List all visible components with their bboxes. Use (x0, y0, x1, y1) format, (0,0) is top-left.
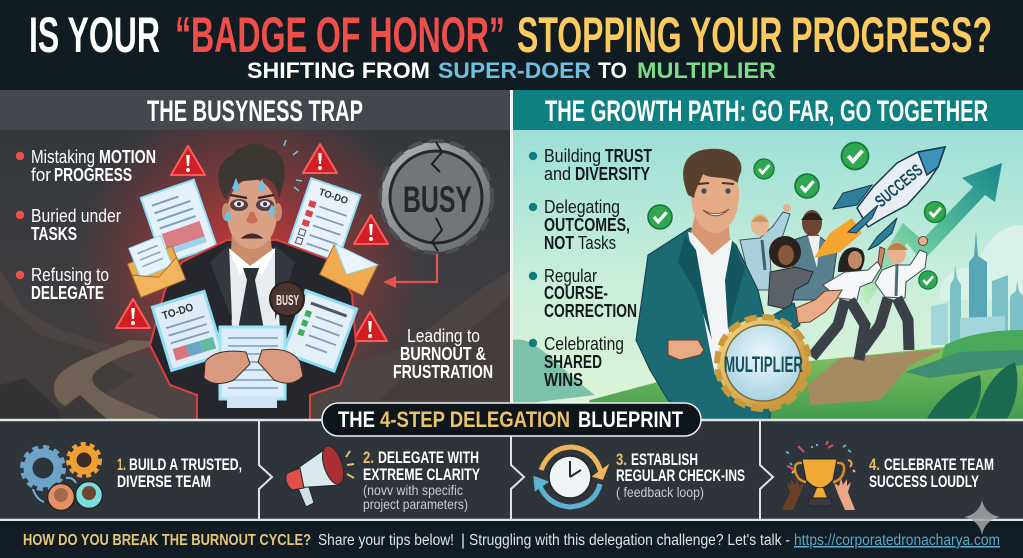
bullet list: WINS (544, 370, 583, 390)
rocket flame (814, 218, 862, 258)
step 3: REGULAR CHECK-INS (616, 467, 745, 485)
blueprint banner (322, 403, 701, 436)
bullet list (16, 147, 156, 303)
jacket (636, 228, 800, 422)
team (740, 204, 928, 360)
document to-do lower (152, 291, 223, 370)
bullet list: Buried under (31, 206, 121, 226)
bullet list: for (31, 165, 51, 185)
document to-do (288, 178, 360, 261)
panel background (0, 130, 511, 422)
burnout callout (393, 326, 493, 382)
teammate afro (768, 236, 813, 310)
icons: warning triangles (116, 144, 388, 341)
neck (231, 232, 272, 266)
title: IS YOUR (29, 7, 160, 63)
collar (229, 246, 275, 275)
eyes (230, 195, 274, 211)
document centre (220, 327, 285, 408)
step 2: project parameters) (363, 496, 468, 512)
bullet list: OUTCOMES, (544, 215, 630, 235)
steps background (0, 420, 1023, 521)
document left (141, 180, 217, 264)
bullet list (529, 146, 652, 390)
sparkle watermark (964, 500, 1000, 535)
hair (683, 149, 741, 198)
bullet list: Tasks (578, 233, 616, 253)
head (691, 157, 739, 233)
step 1: 1. (117, 456, 126, 474)
envelope right (320, 244, 378, 295)
rocket: SUCCESS (871, 161, 926, 211)
step 2: DELEGATE WITH (378, 449, 479, 467)
envelope left (122, 233, 185, 297)
document checklist lower (283, 291, 357, 371)
panel: delegation blueprint steps (0, 420, 1023, 521)
shirt (688, 232, 732, 375)
icon: clock with arrows (535, 447, 606, 507)
suit body (150, 240, 356, 422)
bullet list: NOT (544, 233, 574, 253)
step 3 (535, 447, 745, 507)
bullet list: Delegating (544, 197, 620, 217)
teammate suit (793, 210, 837, 300)
rocket (833, 147, 945, 250)
bullet list: Refusing to (31, 265, 109, 285)
neck (691, 215, 730, 255)
panel divider (510, 90, 513, 422)
step 2: 2. (363, 449, 374, 467)
bullet list: SHARED (544, 352, 602, 372)
step 2 (286, 443, 480, 512)
arrow to man (383, 254, 437, 288)
step 4 (782, 441, 994, 510)
bullet list: Building (544, 146, 601, 166)
subtitle: SUPER-DOER (438, 58, 591, 83)
small busy badge: BUSY (276, 292, 299, 309)
smile and eyes (698, 183, 734, 216)
hands (668, 290, 842, 360)
city skyline (931, 230, 1023, 345)
step 1: BUILD A TRUSTED, (129, 456, 242, 474)
step 2: EXTREME CLARITY (363, 466, 480, 484)
burnout callout: Leading to (407, 326, 480, 346)
document to-do: TO-DO (317, 187, 349, 207)
bullet list: COURSE- (544, 283, 608, 303)
bullet list: TRUST (605, 146, 652, 166)
bullet list: PROGRESS (54, 165, 132, 185)
chevron dividers (0, 420, 1023, 520)
tie (238, 268, 264, 345)
header band (0, 0, 1023, 90)
teammate woman (812, 247, 885, 360)
cloud (940, 225, 1023, 300)
burdened man (122, 140, 378, 422)
bullet list: and (544, 164, 571, 184)
busy badge: BUSY (403, 179, 472, 220)
footer call to action: Struggling with this delegation challenge? Let's talk - (469, 532, 790, 549)
heading bar (0, 90, 510, 130)
step 3: ESTABLISH (631, 451, 698, 469)
shirt (229, 248, 280, 330)
blueprint banner: THE (338, 407, 375, 432)
rocky ground (0, 270, 511, 422)
step 2: (novv with specific (363, 482, 463, 498)
panel: the busyness trap (0, 90, 511, 422)
bullet list: DIVERSITY (575, 164, 650, 184)
footer call to action: HOW DO YOU BREAK THE BURNOUT CYCLE? (23, 532, 311, 549)
subtitle: TO (598, 58, 627, 83)
panel: the growth path (513, 90, 1023, 422)
step 3: ( feedback loop) (616, 484, 704, 500)
hands (204, 349, 303, 384)
bullet list: CORRECTION (544, 301, 637, 321)
step 4: SUCCESS LOUDLY (869, 473, 979, 491)
bullet list: MOTION (99, 147, 156, 167)
lapels (678, 235, 745, 340)
bullet list: Mistaking (31, 147, 95, 167)
blueprint banner: 4-STEP DELEGATION (380, 407, 570, 432)
nose and mouth (246, 212, 258, 224)
footer call to action (0, 521, 1023, 558)
bullet list: Celebrating (544, 334, 624, 354)
title: “BADGE OF HONOR” (175, 7, 505, 63)
teammate glasses (740, 204, 791, 290)
bullet list: DELEGATE (31, 283, 104, 303)
footer call to action: https://corporatedronacharya.com (794, 532, 1000, 549)
icon: trophy and hands (782, 441, 855, 510)
head (227, 179, 277, 249)
sweat (225, 140, 302, 221)
bullet list: TASKS (31, 224, 77, 244)
icon: megaphone (286, 443, 354, 507)
hair (218, 144, 285, 200)
green growth arrow (860, 163, 1002, 305)
step 1 (22, 444, 242, 510)
lapels (210, 245, 295, 320)
step 1: DIVERSE TEAM (117, 473, 211, 491)
teammate man (862, 236, 928, 350)
multiplier man (636, 149, 842, 422)
blueprint banner: BLUEPRINT (578, 407, 683, 432)
bullet list: Regular (544, 266, 597, 286)
icons: green checks (648, 142, 946, 289)
heading: THE BUSYNESS TRAP (147, 95, 363, 128)
title (29, 7, 992, 63)
footer call to action: | (461, 532, 465, 549)
multiplier badge: MULTIPLIER (724, 352, 803, 377)
icon: gears and team (22, 444, 102, 510)
step 4: 4. (869, 456, 880, 474)
small busy badge (270, 282, 304, 316)
hill and path (513, 330, 1023, 422)
document to-do lower: TO-DO (161, 301, 195, 322)
burnout callout: BURNOUT & (400, 344, 486, 364)
step 3: 3. (616, 451, 627, 469)
panel background (513, 130, 1023, 422)
burnout callout: FRUSTRATION (393, 362, 493, 382)
subtitle (247, 58, 776, 83)
busy badge (381, 142, 491, 252)
footer call to action: Share your tips below! (318, 532, 454, 549)
multiplier badge (717, 317, 809, 409)
subtitle: SHIFTING FROM (247, 58, 430, 83)
subtitle: MULTIPLIER (637, 58, 776, 83)
heading bar (513, 90, 1023, 130)
